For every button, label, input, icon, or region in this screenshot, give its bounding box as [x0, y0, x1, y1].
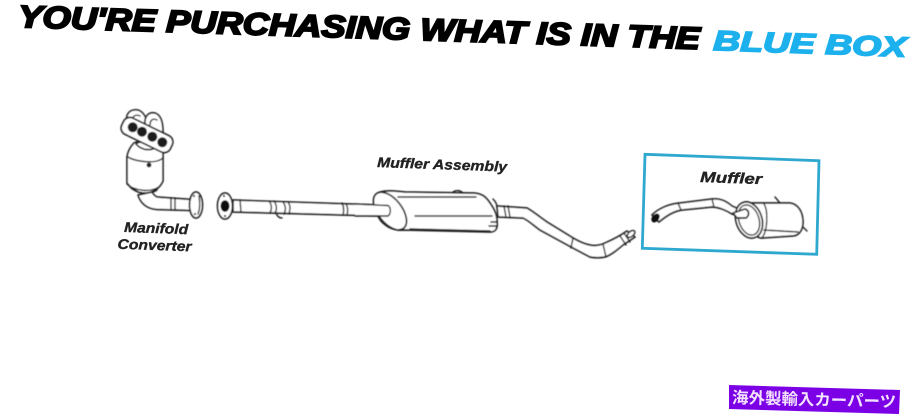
tail pipe: [493, 199, 636, 258]
manifold runners: [127, 110, 163, 134]
muffler body: [355, 186, 497, 236]
muffler diagram: [650, 197, 807, 242]
inlet flange: [218, 193, 232, 219]
manifold flange with ports: [119, 115, 175, 155]
badge: imported car parts: 海外製輸入カーパーツ: [732, 388, 896, 411]
title: black text: YOU'RE PURCHASING WHAT IS IN THE: [18, 0, 702, 56]
catalytic converter body: [127, 141, 163, 193]
title: blue text: BLUE BOX: [713, 25, 910, 63]
blue box: [642, 154, 819, 254]
front pipe: [233, 200, 380, 218]
muffler assembly label: Muffler Assembly: [377, 154, 509, 175]
muffler label: Muffler: [700, 169, 764, 188]
manifold converter label: Manifold: [124, 219, 189, 237]
manifold converter diagram: [119, 110, 202, 218]
title: [18, 0, 910, 63]
manifold converter label: Converter: [117, 236, 194, 254]
badge: imported car parts: [729, 385, 900, 414]
muffler tail pipe: [650, 199, 745, 224]
outlet flange: [190, 192, 202, 218]
muffler can: [731, 197, 807, 242]
muffler assembly diagram: [218, 186, 636, 258]
converter outlet pipe: [138, 192, 192, 210]
